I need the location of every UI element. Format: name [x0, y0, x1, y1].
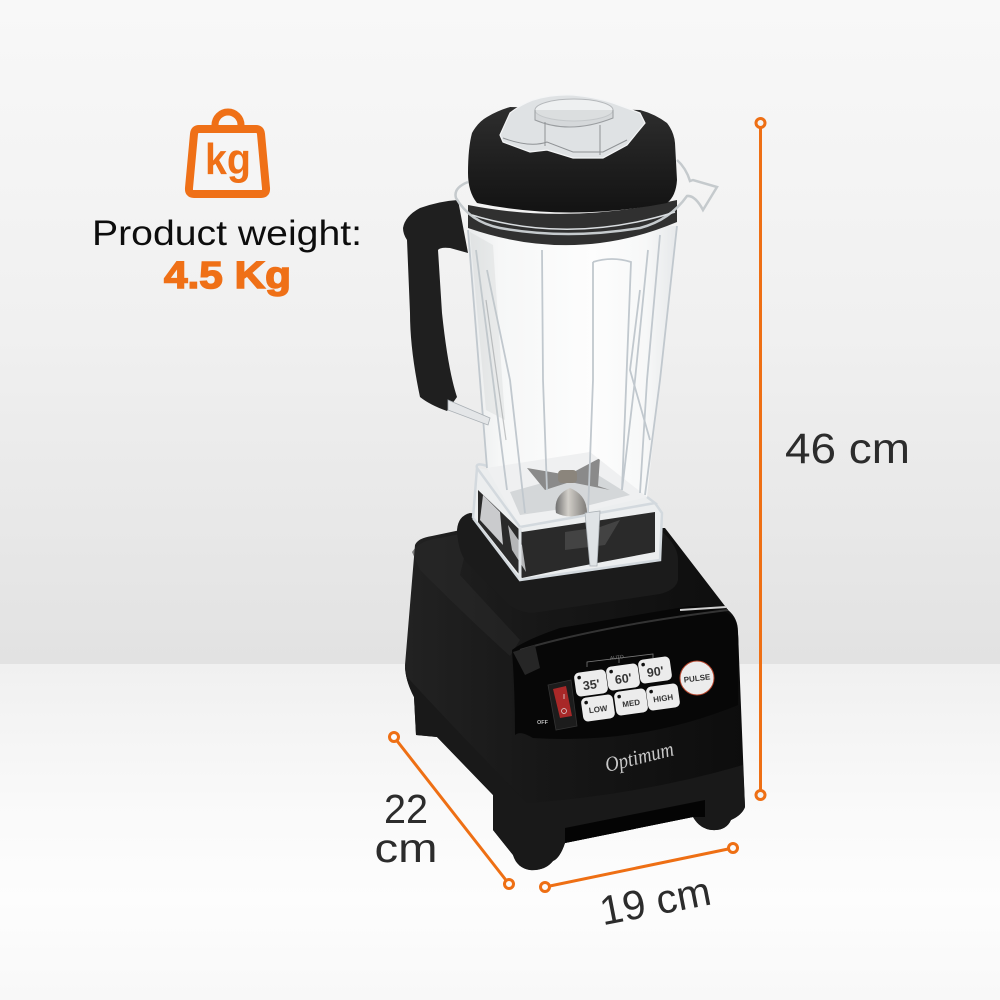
lower base band	[405, 665, 745, 870]
button 35	[573, 669, 609, 697]
base top reflection	[412, 532, 520, 656]
underside recess	[565, 800, 705, 843]
button 35: 35'	[582, 677, 601, 693]
blade assembly	[527, 458, 610, 516]
label: height: 46 cm	[785, 425, 910, 473]
drive socket seen through collar	[478, 490, 655, 578]
control panel hood	[512, 606, 739, 739]
button med	[613, 688, 649, 716]
jar lower collar	[473, 452, 662, 580]
auto bracket	[587, 654, 653, 667]
heading: product weight: Product weight:	[92, 214, 362, 253]
jar body	[468, 226, 677, 527]
jar handle	[403, 200, 490, 425]
brand logo: Optimum	[602, 737, 676, 777]
rim highlight	[472, 212, 675, 229]
button 60: 60'	[614, 671, 633, 687]
button low: LOW	[588, 704, 609, 715]
blender	[403, 95, 745, 870]
label: depth	[374, 786, 438, 871]
button 90: 90'	[646, 664, 665, 680]
button pulse: PULSE	[683, 672, 712, 685]
background floor	[0, 664, 1000, 1000]
clear lid cap	[500, 95, 645, 158]
jar floor	[487, 452, 647, 527]
button high	[645, 683, 681, 711]
button low	[580, 694, 616, 722]
button high: HIGH	[653, 693, 674, 704]
value: 4.5 Kg: 4.5 Kg	[164, 255, 291, 297]
icon: kg weight	[189, 112, 266, 194]
label: depth: 22	[384, 786, 428, 832]
button 90	[637, 656, 673, 684]
button med: MED	[622, 698, 641, 709]
icon: kg weight: kg	[205, 135, 251, 184]
jar lid	[468, 107, 677, 212]
button 60	[605, 663, 641, 691]
width dimension line	[540, 844, 738, 892]
label: depth: cm	[374, 825, 438, 871]
panel highlights	[520, 610, 728, 650]
button pulse	[680, 661, 714, 695]
jar ribs	[468, 226, 677, 513]
dark band under rim	[468, 200, 677, 245]
motor base	[405, 528, 745, 870]
rubber gasket	[457, 513, 678, 613]
collar stem	[585, 511, 600, 566]
auto bracket: AUTO	[610, 654, 624, 662]
collar rim highlights	[473, 464, 662, 580]
depth dimension line	[390, 732, 514, 888]
power switch	[548, 680, 577, 730]
height dimension line	[756, 118, 765, 800]
off label: OFF	[537, 720, 549, 726]
label: width: 19 cm	[596, 868, 715, 934]
jar rim and spout	[456, 160, 717, 234]
background wall	[0, 0, 1000, 664]
